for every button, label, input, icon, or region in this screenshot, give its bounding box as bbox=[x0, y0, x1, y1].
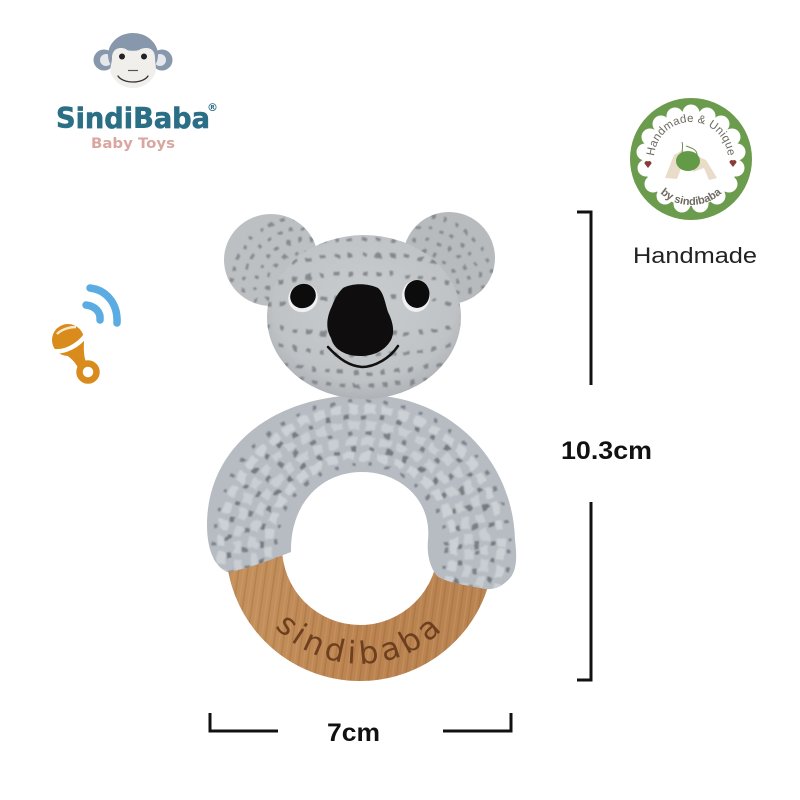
badge bottom text: by sindibaba bbox=[660, 187, 722, 206]
badge: Handmade & Unique by Sindibaba bbox=[630, 98, 752, 220]
rattle bbox=[52, 324, 96, 380]
koala head bbox=[265, 235, 463, 399]
koala nose bbox=[327, 284, 393, 356]
left eye bbox=[283, 279, 323, 317]
right ear bbox=[406, 212, 495, 303]
badge top text: Handmade & Unique bbox=[646, 114, 734, 156]
left heart bbox=[644, 161, 652, 168]
height bracket upper bbox=[577, 212, 591, 385]
right heart bbox=[729, 160, 737, 167]
registered mark: ® bbox=[207, 101, 218, 114]
engraved ring text: sindibaba: sindibaba bbox=[276, 618, 440, 664]
width value: 7cm bbox=[327, 719, 380, 747]
width bracket right bbox=[443, 713, 511, 731]
infographic canvas bbox=[52, 33, 756, 741]
icon: rattle with sound waves bbox=[52, 288, 117, 380]
height dimension: 10.3cm bbox=[561, 212, 652, 680]
crochet ring cover bbox=[207, 396, 516, 590]
wooden ring bbox=[254, 441, 466, 653]
sound waves bbox=[86, 288, 117, 323]
height value: 10.3cm bbox=[561, 437, 652, 465]
scalloped white inner seal bbox=[636, 104, 746, 212]
koala smile bbox=[328, 346, 398, 367]
tagline: Baby Toys: Baby Toys bbox=[91, 136, 175, 152]
logo: SindiBaba Baby Toys bbox=[56, 33, 218, 152]
right eye bbox=[402, 280, 430, 312]
width bracket left bbox=[210, 713, 278, 731]
icon: monkey face bbox=[94, 33, 172, 88]
height bracket lower bbox=[577, 502, 591, 680]
width dimension: 7cm bbox=[210, 713, 511, 747]
product: koala crochet teether ring bbox=[207, 212, 516, 681]
label: Handmade: Handmade bbox=[633, 243, 757, 268]
wordmark: SindiBaba: SindiBaba bbox=[56, 102, 210, 135]
icon: hands holding green yarn bbox=[665, 142, 717, 180]
left ear bbox=[224, 214, 316, 306]
